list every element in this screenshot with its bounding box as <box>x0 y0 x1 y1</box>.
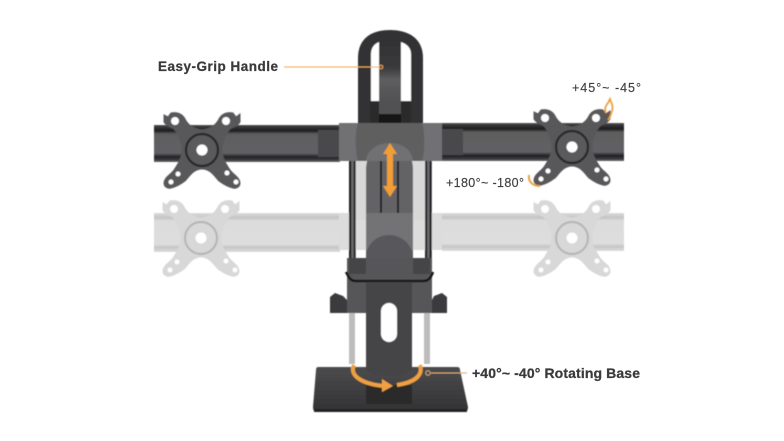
arrow: plate rotation <box>529 175 540 186</box>
lower ghost rods <box>349 310 430 364</box>
ghost plate right <box>534 201 610 276</box>
monitor plate left <box>164 113 240 188</box>
right arm <box>442 123 624 161</box>
collar <box>346 258 433 313</box>
label: rotating base: +40°~ -40° Rotating Base <box>472 365 640 381</box>
label: handle: Easy-Grip Handle <box>158 59 278 74</box>
base plate <box>313 367 468 412</box>
cable slot <box>381 303 397 342</box>
arrow: tilt rotation <box>605 99 612 120</box>
left arm <box>154 125 340 162</box>
callout line: base <box>426 371 467 375</box>
side brackets <box>330 293 447 313</box>
lower column <box>366 282 412 376</box>
arrow: base rotation <box>353 365 421 392</box>
ghost plate left <box>163 201 239 276</box>
callout line: handle <box>284 65 383 69</box>
handle <box>358 30 423 125</box>
ghost position: lower arm <box>154 160 624 276</box>
arrow: height adjustment <box>383 143 397 197</box>
centre crosspiece <box>339 123 442 161</box>
column and rails <box>349 143 432 290</box>
monitor plate right <box>534 110 610 185</box>
label: rotation range: +180°~ -180° <box>446 176 524 190</box>
label: tilt range: +45°~ -45° <box>572 81 641 95</box>
